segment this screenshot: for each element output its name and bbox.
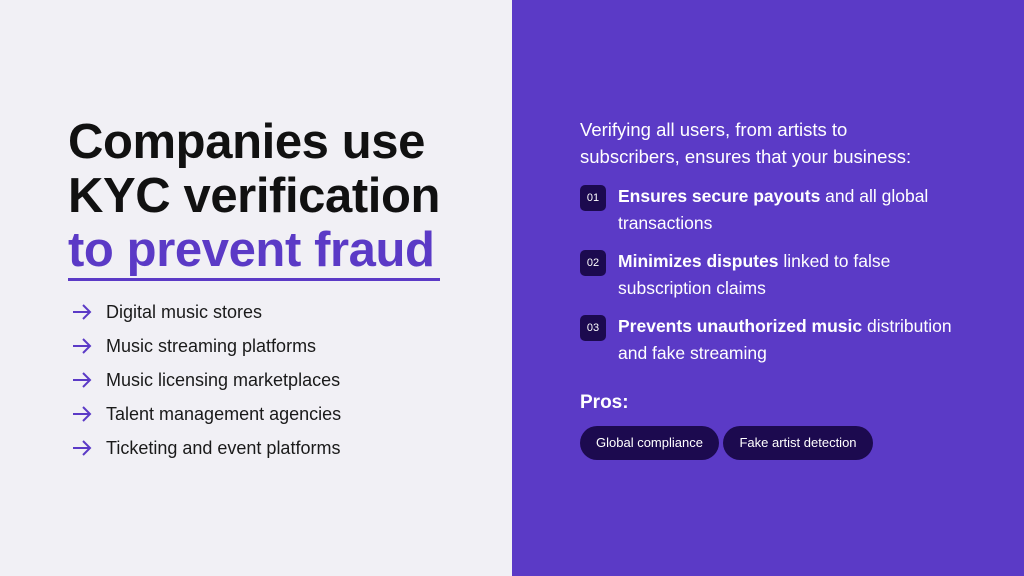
- item 01: 01: [587, 192, 599, 204]
- panel: right purple background: [512, 0, 1024, 576]
- list item: Music streaming platforms: [106, 336, 316, 356]
- list item: Talent management agencies: [106, 404, 341, 424]
- list item: Music licensing marketplaces: [106, 370, 340, 390]
- intro text: Verifying all users, from artists to: [580, 119, 847, 140]
- pill: global compliance: [580, 426, 719, 460]
- title: [68, 115, 440, 281]
- intro text: subscribers, ensures that your business:: [580, 146, 911, 167]
- list item: Digital music stores: [106, 302, 262, 322]
- item 01: Ensures secure payouts and all global transactions: [618, 186, 928, 233]
- pros heading: Pros:: [580, 392, 629, 413]
- item 03: 03: [587, 322, 599, 334]
- item 02: 02: [587, 257, 599, 269]
- intro text: [580, 119, 911, 167]
- title: to prevent fraud: [68, 223, 435, 277]
- item 03: Prevents unauthorized music distribution and fake streaming: [618, 316, 952, 363]
- list: industries: [73, 302, 341, 458]
- title: KYC verification: [68, 169, 440, 223]
- list item: Ticketing and event platforms: [106, 438, 340, 458]
- item 02: Minimizes disputes linked to false subscription claims: [618, 251, 890, 298]
- pill: fake artist detection: [723, 426, 873, 460]
- pill: fake artist detection: Fake artist detection: [739, 435, 857, 450]
- pill: global compliance: Global compliance: [596, 435, 703, 450]
- title: Companies use: [68, 115, 425, 169]
